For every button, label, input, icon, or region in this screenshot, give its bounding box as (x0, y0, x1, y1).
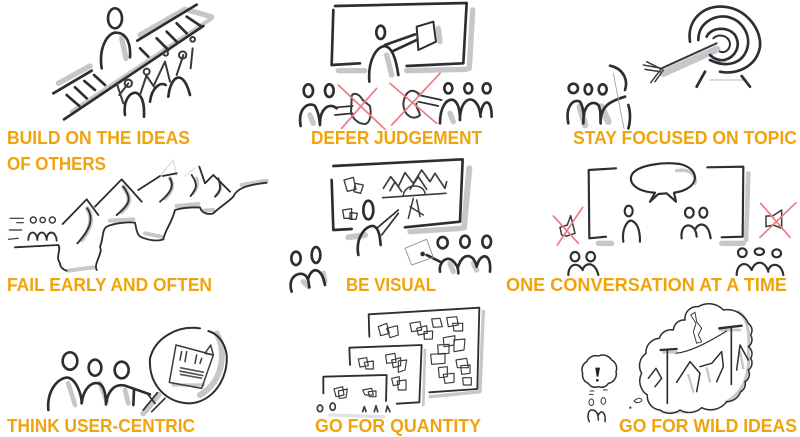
panel: build on the ideas of others (7, 5, 212, 174)
icon: presenter at board with crossed-out hands (300, 3, 492, 129)
panel: be visual (291, 159, 491, 295)
panel: stay focused on topic (568, 7, 797, 148)
panel: go for wild ideas (582, 304, 797, 436)
icon: users behind magnifying glass (48, 328, 227, 413)
icon: arrow hitting target with group (568, 7, 760, 128)
caption: stay focused on topic: STAY FOCUSED ON TOPIC (573, 128, 797, 148)
icon: group racing over mountain ridge (8, 160, 267, 271)
caption: be visual: BE VISUAL (346, 275, 436, 295)
icon: conversation in brackets with muted speakers (553, 163, 796, 275)
icon: person on ladder with group (53, 5, 212, 119)
caption: go for wild ideas: GO FOR WILD IDEAS (619, 416, 797, 436)
caption: one conversation at a time: ONE CONVERSATION AT A TIME (506, 275, 787, 295)
caption: think user-centric: THINK USER-CENTRIC (7, 416, 195, 436)
icon: three boards filled with sticky notes (317, 308, 483, 417)
panel: fail early and often (7, 160, 267, 295)
caption: of others: OF OTHERS (7, 154, 106, 174)
icon: thought clouds with wild mountain idea (582, 304, 752, 422)
panel: think user-centric (7, 328, 227, 436)
panel: go for quantity (315, 308, 483, 436)
icon: presenter sketching on board with audience (291, 159, 491, 292)
caption: fail early and often: FAIL EARLY AND OFTEN (7, 275, 212, 295)
caption: build on the ideas: BUILD ON THE IDEAS (7, 128, 190, 148)
panel: defer judgement (300, 3, 492, 148)
caption: defer judgement: DEFER JUDGEMENT (311, 128, 482, 148)
panel: one conversation at a time (506, 163, 796, 295)
caption: go for quantity: GO FOR QUANTITY (315, 416, 481, 436)
